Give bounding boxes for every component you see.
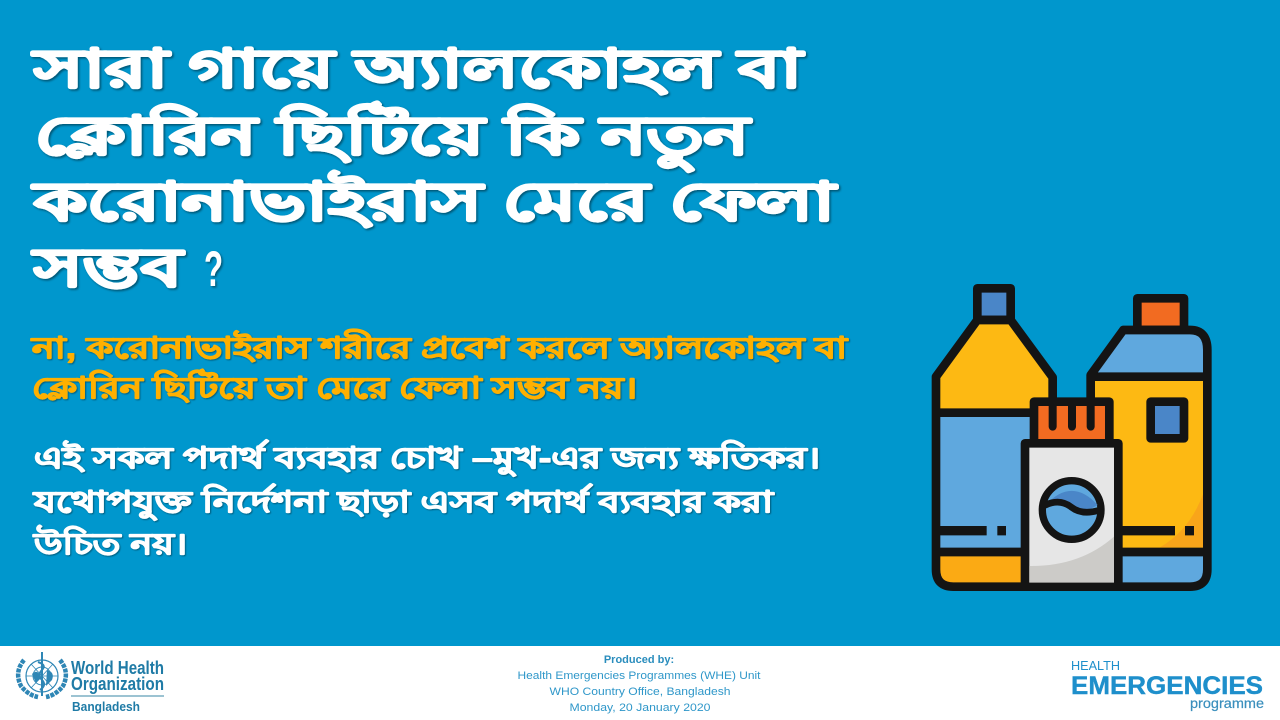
orange answer text <box>31 328 849 405</box>
logo wordmark: World Health <box>71 658 164 678</box>
footer credits: Produced by: <box>604 654 674 666</box>
white footer band <box>0 646 1280 720</box>
Health Emergencies programme logo: EMERGENCIES <box>1071 672 1263 700</box>
logo wordmark: Bangladesh <box>72 700 140 714</box>
footer credits <box>518 654 760 714</box>
title: question heading <box>31 40 837 298</box>
Health Emergencies programme logo: programme <box>1190 696 1264 711</box>
icon: WHO emblem <box>18 652 66 697</box>
orange answer text: ক্লোরিন ছিটিয়ে তা মেরে ফেলা সম্ভব নয়। <box>32 368 637 405</box>
white warning text: এই সকল পদার্থ ব্যবহার চোখ –মুখ-এর জন্য ক্ষতিকর। <box>34 439 820 477</box>
left bottle <box>936 288 1053 587</box>
WHO logo <box>18 652 164 714</box>
logo wordmark: Organization <box>71 674 164 694</box>
middle bottle <box>1025 402 1118 587</box>
right bottle <box>1091 298 1207 587</box>
title: question heading: করোনাভাইরাস মেরে ফেলা <box>31 171 837 232</box>
footer credits: Monday, 20 January 2020 <box>570 702 710 714</box>
orange answer text: না, করোনাভাইরাস শরীরে প্রবেশ করলে অ্যালকোহল বা <box>31 328 849 365</box>
title: question heading: সম্ভব <box>31 239 185 298</box>
white warning text: যথোপযুক্ত নির্দেশনা ছাড়া এসব পদার্থ ব্যবহার করা <box>33 483 775 521</box>
Health Emergencies programme logo <box>1071 658 1264 711</box>
white warning text <box>33 439 820 561</box>
footer credits: WHO Country Office, Bangladesh <box>550 686 730 698</box>
title: question heading: ? <box>204 241 223 297</box>
title: question heading: সারা গায়ে অ্যালকোহল বা <box>31 40 804 99</box>
logo wordmark <box>71 658 164 714</box>
white warning text: উচিত নয়। <box>33 524 187 561</box>
icon: three cleaning bottles <box>936 288 1207 587</box>
footer credits: Health Emergencies Programmes (WHE) Unit <box>518 670 760 682</box>
title: question heading: ক্লোরিন ছিটিয়ে কি নতুন <box>35 101 752 173</box>
Health Emergencies programme logo: HEALTH <box>1071 658 1120 673</box>
